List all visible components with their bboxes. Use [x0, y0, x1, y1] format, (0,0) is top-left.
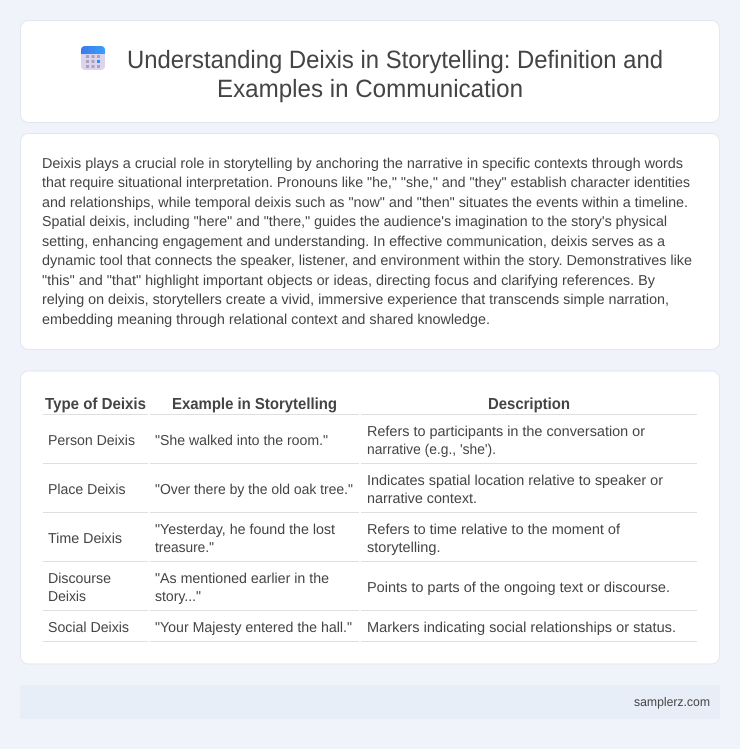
- title: Examples in Communication: [217, 75, 523, 103]
- table row: discourse deixis: Discourse: [48, 571, 111, 587]
- table header row: Type of Deixis: [45, 396, 146, 413]
- table row: place deixis: narrative context.: [367, 491, 477, 507]
- table header row: [43, 396, 697, 414]
- footer bar: [20, 685, 720, 719]
- table row: discourse deixis: [43, 571, 697, 610]
- table row: person deixis: "She walked into the room.": [155, 433, 328, 449]
- table row: place deixis: Indicates spatial location relative to speaker or: [367, 473, 663, 489]
- table header row: Example in Storytelling: [172, 396, 337, 413]
- panel: deixis table: [20, 371, 720, 664]
- table row: time deixis: "Yesterday, he found the lost: [155, 522, 335, 538]
- text block: introduction paragraph: that require situational interpretation. Pronouns like "he," "she," and "they" establish character identities: [42, 175, 690, 191]
- table row: time deixis: Time Deixis: [48, 531, 122, 547]
- table row: time deixis: treasure.": [155, 540, 214, 556]
- table row: discourse deixis: story...": [155, 589, 201, 605]
- text block: introduction paragraph: "this" and "that" highlight important objects or ideas, directing focus and clarifying references. By: [42, 273, 656, 289]
- table row: social deixis: "Your Majesty entered the hall.": [155, 620, 352, 636]
- title: Understanding Deixis in Storytelling: Definition and: [127, 46, 663, 74]
- title: [127, 46, 663, 103]
- text block: introduction paragraph: Deixis plays a crucial role in storytelling by anchoring the narrative in specific contexts through words: [42, 156, 683, 172]
- icon: calendar: [81, 46, 105, 70]
- table row: place deixis: [43, 473, 697, 512]
- table row: social deixis: Social Deixis: [48, 620, 129, 636]
- table row: person deixis: Person Deixis: [48, 433, 135, 449]
- text block: introduction paragraph: and relationships, while temporal deixis such as "now" and "then" situates the events within a timeline.: [42, 195, 688, 211]
- table row: discourse deixis: Deixis: [48, 589, 86, 605]
- text block: introduction paragraph: embedding meaning through relational context and shared knowledge.: [42, 312, 490, 328]
- table row: place deixis: Place Deixis: [48, 482, 126, 498]
- text block: introduction paragraph: dynamic tool that connects the speaker, listener, and environment within the story. Demonstratives like: [42, 253, 692, 269]
- text block: introduction paragraph: relying on deixis, storytellers create a vivid, immersive experience that transcends simple narration,: [42, 292, 669, 308]
- table header row: Description: [488, 396, 570, 413]
- table row: time deixis: storytelling.: [367, 540, 440, 556]
- table row: person deixis: Refers to participants in the conversation or: [367, 424, 645, 440]
- footer source text: samplerz.com: [634, 695, 710, 709]
- table row: discourse deixis: "As mentioned earlier in the: [155, 571, 329, 587]
- table row: time deixis: Refers to time relative to the moment of: [367, 522, 621, 538]
- table row: discourse deixis: Points to parts of the ongoing text or discourse.: [367, 580, 670, 596]
- table row: time deixis: [43, 522, 697, 562]
- panel: header: [20, 20, 720, 122]
- table row: person deixis: [43, 424, 697, 464]
- text block: introduction paragraph: [42, 156, 692, 328]
- text block: introduction paragraph: Spatial deixis, including "here" and "there," guides the audience's imagination to the story's physical: [42, 214, 667, 230]
- panel: introduction: [20, 134, 720, 350]
- table row: person deixis: narrative (e.g., 'she').: [367, 442, 496, 458]
- table row: social deixis: Markers indicating social relationships or status.: [367, 620, 676, 636]
- text block: introduction paragraph: setting, enhancing engagement and understanding. In effective communication, deixis serves as a: [42, 234, 665, 250]
- table row: social deixis: [43, 620, 697, 642]
- table row: place deixis: "Over there by the old oak tree.": [155, 482, 353, 498]
